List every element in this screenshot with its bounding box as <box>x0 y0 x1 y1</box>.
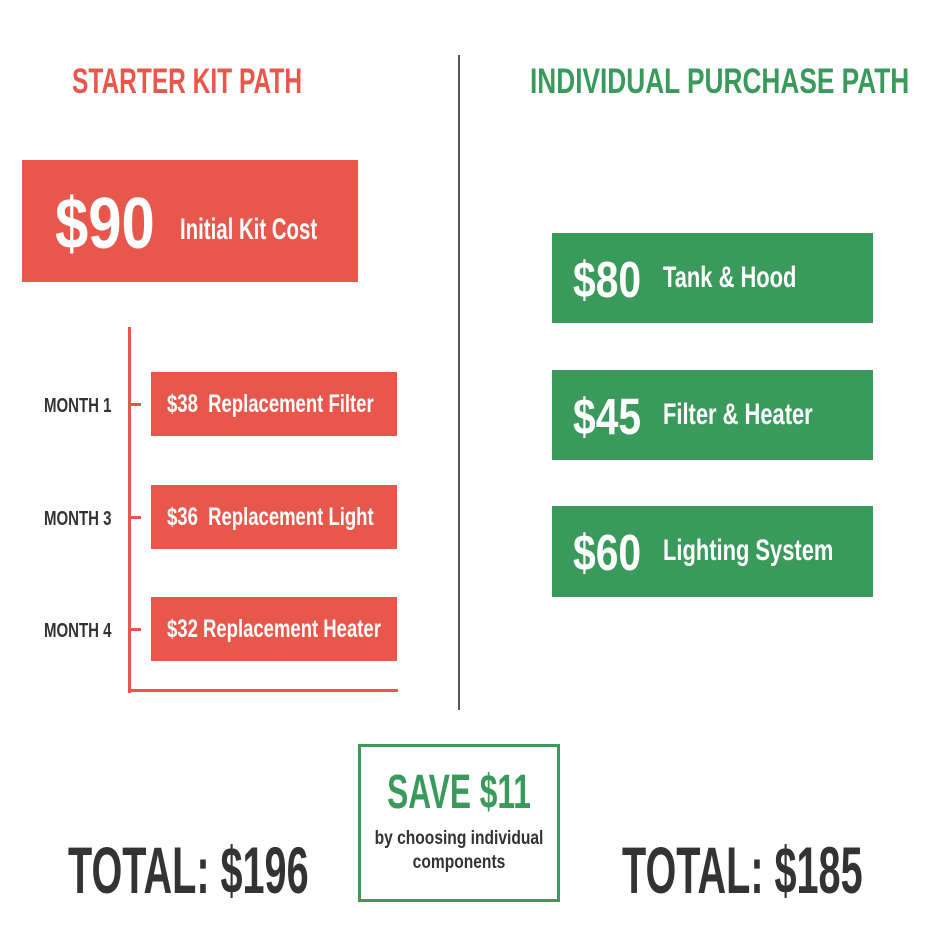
month 1 item: MONTH 1 <box>44 395 112 417</box>
panel: filter & heater: Filter & Heater <box>663 398 813 431</box>
callout: savings: by choosing individual <box>375 828 543 849</box>
month 4 item: MONTH 4 <box>44 620 112 642</box>
callout: savings <box>358 744 560 902</box>
panel: lighting system <box>552 506 873 597</box>
panel: lighting system: Lighting System <box>663 534 833 567</box>
panel: initial kit cost <box>22 160 358 282</box>
month 4 item: $32 Replacement Heater <box>167 615 381 643</box>
callout: savings: SAVE $11 <box>387 766 531 819</box>
month 3 item: $36 Replacement Light <box>167 503 374 531</box>
panel: filter & heater: $45 <box>573 388 641 445</box>
month 4 item <box>44 597 397 661</box>
panel: tank & hood <box>552 233 873 323</box>
panel: filter & heater <box>552 370 873 460</box>
total: individual: TOTAL: $185 <box>622 833 863 907</box>
title: individual purchase path: INDIVIDUAL PURCHASE PATH <box>530 62 909 101</box>
panel: initial kit cost: $90 <box>55 184 155 264</box>
month 1 item <box>44 372 397 436</box>
title: starter kit path: STARTER KIT PATH <box>72 62 302 101</box>
panel: lighting system: $60 <box>573 524 641 581</box>
panel: initial kit cost: Initial Kit Cost <box>180 213 317 246</box>
month 3 item <box>44 485 397 549</box>
total: starter: TOTAL: $196 <box>68 833 309 907</box>
callout: savings: components <box>413 852 505 873</box>
panel: tank & hood: $80 <box>573 251 641 308</box>
month 3 item: MONTH 3 <box>44 508 112 530</box>
panel: tank & hood: Tank & Hood <box>663 261 796 294</box>
month 1 item: $38 Replacement Filter <box>167 390 374 418</box>
timeline <box>44 327 398 693</box>
